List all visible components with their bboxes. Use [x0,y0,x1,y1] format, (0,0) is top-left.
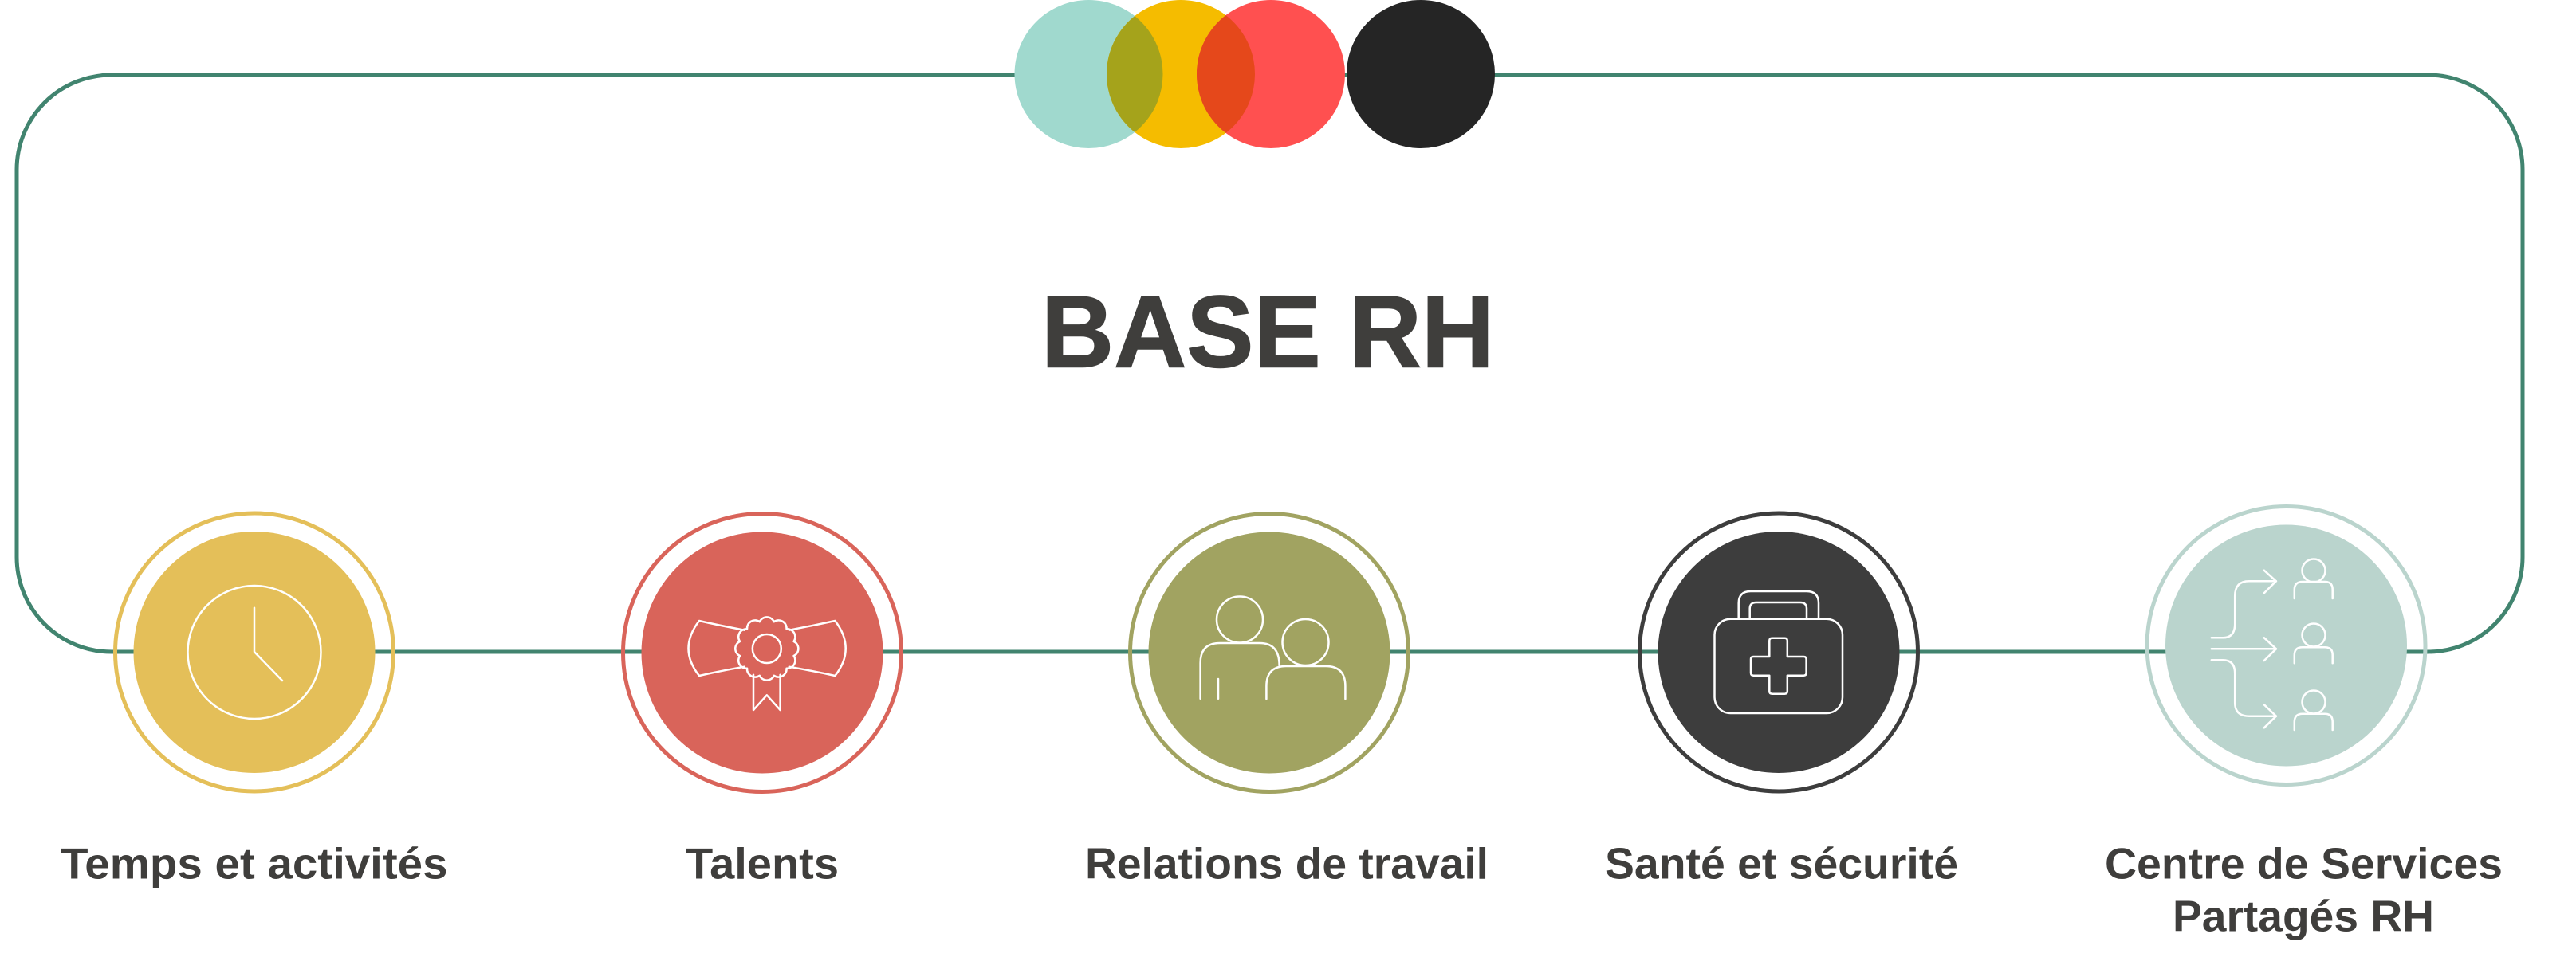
panel: Temps et activités [61,513,448,889]
logo: four overlapping circles [1014,0,1495,148]
icon: diploma with seal [689,617,846,710]
label: Centre de Services Partagés RH [2105,839,2503,941]
icon: clock [188,586,321,719]
label: Temps et activités: Temps et activités [61,839,448,889]
icon ring and disc: yellow [115,513,394,791]
icon ring and disc: pale green [2147,507,2425,784]
label: Talents: Talents [686,839,839,889]
panel: Centre de Services Partagés RH [2105,507,2503,941]
panel: Relations de travail [1085,513,1489,889]
label: Relations de travail: Relations de travail [1085,839,1489,889]
label: Centre de Services Partagés RH: Centre de Services [2105,839,2503,889]
icon ring and disc: charcoal [1639,513,1918,791]
icon: first aid kit [1714,591,1843,713]
label: Centre de Services Partagés RH: Partagés RH [2173,892,2434,941]
panel: Talents [623,513,901,889]
icon ring and disc: red [623,513,901,792]
title: BASE RH [1041,276,1494,390]
frame: rounded connector outline [17,75,2523,652]
icon: two people [1201,596,1345,699]
label: Santé et sécurité: Santé et sécurité [1605,839,1958,889]
panel: Santé et sécurité [1605,513,1958,889]
icon: arrows dispatching to three people [2212,559,2333,730]
icon ring and disc: olive [1131,513,1408,792]
